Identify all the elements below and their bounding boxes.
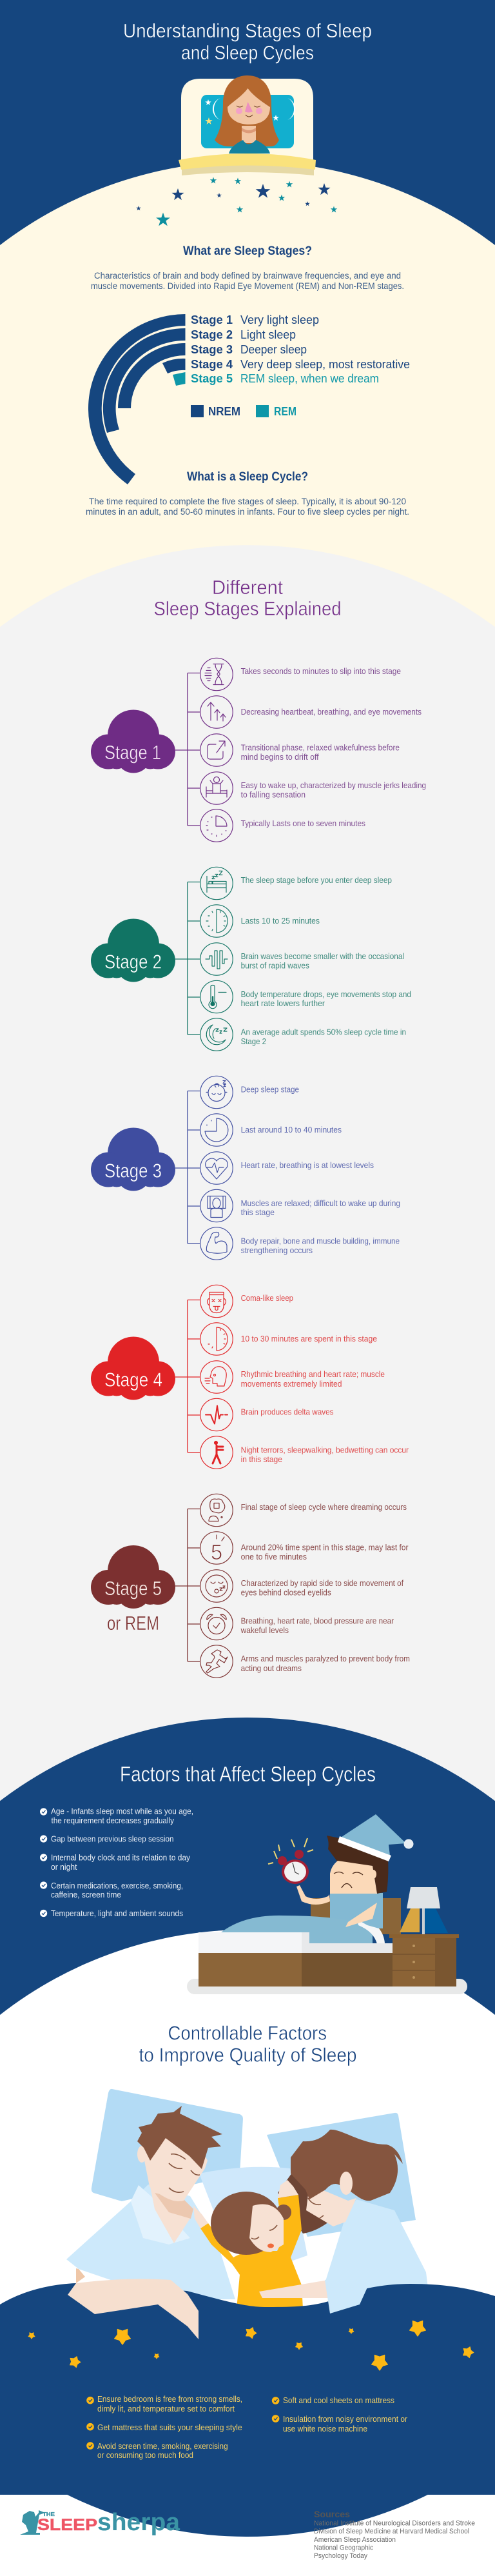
list: controllable factors: use white noise machine: [283, 2424, 367, 2433]
text: stage 4 facts: Rhythmic breathing and heart rate; muscle: [241, 1370, 385, 1379]
icon: bed with zzz: [200, 867, 233, 900]
text: stage 3 facts: Last around 10 to 40 minutes: [241, 1125, 342, 1134]
label: stage 4: Stage 4: [104, 1369, 162, 1391]
icon: flexed arm: [200, 1227, 233, 1260]
icon: thermometer: [200, 980, 233, 1013]
text: stage 3 facts: this stage: [241, 1208, 275, 1217]
text: stage 5 facts: wakeful levels: [240, 1626, 289, 1635]
heading: different sleep stages explained: Different: [212, 576, 283, 599]
background: white dome: [0, 1930, 495, 2495]
icon: moon with zzz: [200, 1018, 233, 1051]
text: stage 4 facts: movements extremely limited: [241, 1380, 342, 1389]
connector lines: [175, 1509, 200, 1661]
list: controllable factors: Avoid screen time, smoking, exercising: [97, 2441, 228, 2451]
stage list: [191, 313, 410, 385]
text: stage 2 facts: Stage 2: [241, 1037, 266, 1046]
stars under bed: [136, 177, 337, 226]
text: stage 3 facts: Deep sleep stage: [241, 1085, 299, 1094]
background: gray stages panel: [0, 545, 495, 2064]
connector lines: [175, 882, 200, 1035]
icon: delta wave: [200, 1398, 233, 1431]
icon: comatose face: [200, 1285, 233, 1318]
title: and Sleep Cycles: [181, 41, 314, 64]
icon: brain wave: [200, 943, 233, 975]
label: stage 3: Stage 3: [104, 1160, 162, 1182]
text: sleep stages definition: [91, 271, 404, 291]
text: sleep cycle definition: The time required to complete the five stages of sleep. Typically, it is about 90-120: [89, 497, 406, 506]
icon: hourglass: [200, 658, 233, 691]
panel: stage 1: [91, 658, 426, 842]
background: top navy band with cream dome: [0, 0, 495, 245]
sources: Division of Sleep Medicine at Harvard Medical School: [314, 2528, 469, 2535]
list: controllable factors: Soft and cool sheets on mattress: [283, 2395, 394, 2405]
icon: three-quarter clock: [200, 1114, 233, 1146]
icon: arrows: [200, 696, 233, 728]
background: bottom navy wave: [0, 2283, 495, 2495]
text: sleep stages definition: muscle movements. Divided into Rapid Eye Movement (REM) and Non-REM stages.: [91, 281, 404, 291]
icon: transition square: [200, 734, 233, 766]
logo: the sleep sherpa: THE: [43, 2511, 55, 2517]
list: factors: caffeine, screen time: [51, 1890, 121, 1899]
heading: controllable factors: to Improve Quality of Sleep: [139, 2044, 357, 2066]
stage list: Stage 2: [191, 328, 233, 341]
text: stage 4 facts: in this stage: [241, 1455, 282, 1464]
logo: the sleep sherpa: SLEEP: [37, 2516, 97, 2534]
list: controllable factors: [86, 2394, 408, 2460]
stage list: Very deep sleep, most restorative: [240, 358, 410, 371]
text: stage 2 facts: heart rate lowers further: [241, 999, 325, 1008]
chart: radial sleep stage bars: [88, 314, 186, 484]
text: stage 1 facts: Takes seconds to minutes to slip into this stage: [241, 667, 401, 676]
text: stage 5 facts: Characterized by rapid side to side movement of: [241, 1579, 403, 1588]
text: stage 4 facts: [241, 1294, 409, 1464]
sources: Sources: [314, 2509, 350, 2519]
text: stage 2 facts: burst of rapid waves: [241, 962, 309, 971]
legend: REM: [274, 405, 296, 418]
icon: dreaming thought: [200, 1494, 233, 1527]
list: factors: Certain medications, exercise, smoking,: [51, 1881, 183, 1890]
connector lines: [175, 1300, 200, 1452]
list: controllable factors: or consuming too much food: [97, 2450, 193, 2460]
stage list: Stage 4: [191, 358, 233, 371]
icon: waking person in bed: [200, 772, 233, 804]
text: sleep cycle definition: minutes in an adult, and 50-60 minutes in infants. Four to five sleep cycles per night.: [86, 507, 409, 517]
icon: five minutes: 5: [211, 1540, 222, 1564]
list: controllable factors: Get mattress that suits your sleeping style: [97, 2422, 242, 2432]
connector lines: [175, 1091, 200, 1243]
text: stage 1 facts: Transitional phase, relaxed wakefulness before: [241, 743, 400, 752]
text: stage 5 facts: Final stage of sleep cycle where dreaming occurs: [241, 1503, 407, 1512]
cloud: stage 1: [91, 709, 175, 773]
text: stage 3 facts: Heart rate, breathing is at lowest levels: [241, 1161, 374, 1170]
background: navy factors dome: [0, 1718, 495, 2537]
heading: different sleep stages explained: [153, 576, 342, 620]
icon: alarm clock: [200, 1607, 233, 1640]
illustration: arms over wave: [68, 2270, 369, 2339]
text: stage 4 facts: Brain produces delta waves: [241, 1408, 334, 1417]
text: stage 3 facts: [241, 1085, 400, 1255]
heading: what are sleep stages: What are Sleep Stages?: [183, 244, 312, 258]
text: stage 1 facts: Decreasing heartbeat, breathing, and eye movements: [241, 708, 422, 717]
icon: heart with pulse: [200, 1152, 233, 1184]
cloud: stage 4: [91, 1336, 175, 1400]
label: stage 2: Stage 2: [104, 951, 162, 973]
text: stage 5 facts: [240, 1503, 410, 1673]
stage list: Stage 5: [191, 372, 233, 385]
text: stage 4 facts: 10 to 30 minutes are spent in this stage: [241, 1334, 377, 1343]
text: stage 2 facts: Body temperature drops, eye movements stop and: [241, 990, 411, 999]
text: stage 2 facts: [241, 876, 411, 1046]
stage list: REM sleep, when we dream: [240, 372, 379, 385]
illustration: sleeping girl in bed: [179, 75, 316, 175]
cloud: stage 3: [91, 1127, 175, 1191]
connector lines: [175, 673, 200, 826]
label: stage 5: Stage 5: [104, 1577, 162, 1600]
logo: the sleep sherpa: [20, 2509, 180, 2536]
label: stage 1: Stage 1: [104, 741, 161, 764]
panel: stage 4: [91, 1285, 409, 1469]
list: factors: the requirement decreases gradually: [52, 1816, 175, 1825]
heading: different sleep stages explained: Sleep Stages Explained: [153, 597, 342, 620]
icon: head breathing: [200, 1361, 233, 1393]
text: stage 4 facts: Night terrors, sleepwalking, bedwetting can occur: [241, 1446, 409, 1455]
legend: [191, 405, 296, 418]
text: stage 3 facts: Muscles are relaxed; difficult to wake up during: [241, 1199, 400, 1208]
text: stage 5 facts: eyes behind closed eyelids: [241, 1588, 331, 1597]
icon: half clock: [200, 905, 233, 937]
sources: National Institute of Neurological Disorders and Stroke: [314, 2520, 475, 2528]
sources: National Geographic: [314, 2544, 373, 2552]
list: factors: Internal body clock and its relation to day: [51, 1853, 191, 1863]
list: controllable factors: Insulation from noisy environment or: [283, 2414, 408, 2424]
heading: factors: Factors that Affect Sleep Cycles: [120, 1762, 376, 1786]
text: sleep stages definition: Characteristics of brain and body defined by brainwave frequencies, and eye and: [94, 271, 401, 281]
text: stage 3 facts: Body repair, bone and muscle building, immune: [241, 1237, 400, 1246]
stage list: Very light sleep: [240, 313, 319, 326]
sources: American Sleep Association: [314, 2536, 396, 2544]
title: Understanding Stages of Sleep: [123, 19, 372, 42]
text: stage 1 facts: [241, 667, 426, 828]
heading: controllable factors: Controllable Factors: [168, 2022, 327, 2045]
cloud: stage 2: [91, 918, 175, 982]
icon: half clock dots: [200, 1323, 233, 1355]
list: factors: or night: [51, 1862, 77, 1872]
text: stage 5 facts: Breathing, heart rate, blood pressure are near: [241, 1617, 394, 1626]
illustration: sleeping family: [66, 2089, 428, 2309]
list: controllable factors: dimly lit, and temperature set to comfort: [97, 2404, 235, 2413]
list: controllable factors: Ensure bedroom is free from strong smells,: [97, 2394, 242, 2404]
stage list: Stage 3: [191, 343, 233, 356]
text: stage 3 facts: strengthening occurs: [241, 1246, 313, 1255]
stage list: Deeper sleep: [240, 343, 307, 356]
text: stage 1 facts: mind begins to drift off: [241, 753, 319, 762]
text: stage 1 facts: to falling sensation: [241, 791, 306, 800]
list: factors: Age - Infants sleep most while as you age,: [51, 1807, 193, 1816]
stage list: Light sleep: [240, 328, 296, 341]
text: stage 4 facts: Coma-like sleep: [241, 1294, 293, 1303]
heading: what is a sleep cycle: What is a Sleep Cycle?: [187, 470, 308, 484]
logo: the sleep sherpa: sherpa: [97, 2509, 180, 2536]
stars: gold: [28, 2321, 475, 2370]
text: stage 2 facts: Lasts 10 to 25 minutes: [241, 916, 320, 926]
icon: five minutes: [200, 1532, 233, 1564]
text: stage 5 facts: Arms and muscles paralyzed to prevent body from: [241, 1654, 410, 1663]
text: stage 5 facts: one to five minutes: [241, 1552, 307, 1561]
illustration: man woken by alarm in bed: [187, 1814, 467, 1994]
sources: [314, 2509, 475, 2560]
text: stage 5 facts: acting out dreams: [241, 1664, 302, 1673]
text: stage 5 facts: Around 20% time spent in this stage, may last for: [241, 1543, 409, 1552]
sources: Psychology Today: [314, 2552, 367, 2560]
panel: stage 2: [91, 867, 411, 1051]
stage list: Stage 1: [191, 313, 233, 326]
list: factors: [40, 1807, 193, 1918]
title: [123, 19, 372, 64]
icon: sleeping baby: [200, 1076, 233, 1109]
icon: woman in window: [200, 1189, 233, 1222]
panel: stage 3: [91, 1076, 400, 1260]
text: stage 1 facts: Typically Lasts one to seven minutes: [241, 819, 365, 828]
heading: controllable factors: [139, 2022, 357, 2066]
list: factors: Gap between previous sleep session: [51, 1834, 174, 1844]
icon: sleeping face: [200, 1570, 233, 1602]
icon: quarter clock: [200, 809, 233, 842]
legend: NREM: [208, 405, 240, 418]
text: stage 2 facts: The sleep stage before you enter deep sleep: [241, 876, 392, 885]
text: stage 2 facts: Brain waves become smaller with the occasional: [241, 952, 404, 961]
text: stage 2 facts: An average adult spends 50% sleep cycle time in: [241, 1028, 406, 1037]
panel: stage 5: [91, 1494, 410, 1678]
text: stage 1 facts: Easy to wake up, characterized by muscle jerks leading: [241, 781, 426, 790]
text: sleep cycle definition: [86, 497, 409, 517]
list: factors: Temperature, light and ambient sounds: [51, 1908, 183, 1918]
icon: runner: [200, 1645, 233, 1678]
background: cream: [0, 0, 495, 645]
label: or REM: or REM: [107, 1612, 159, 1634]
cloud: stage 5: [91, 1545, 175, 1609]
icon: sleepwalker: [200, 1436, 233, 1469]
